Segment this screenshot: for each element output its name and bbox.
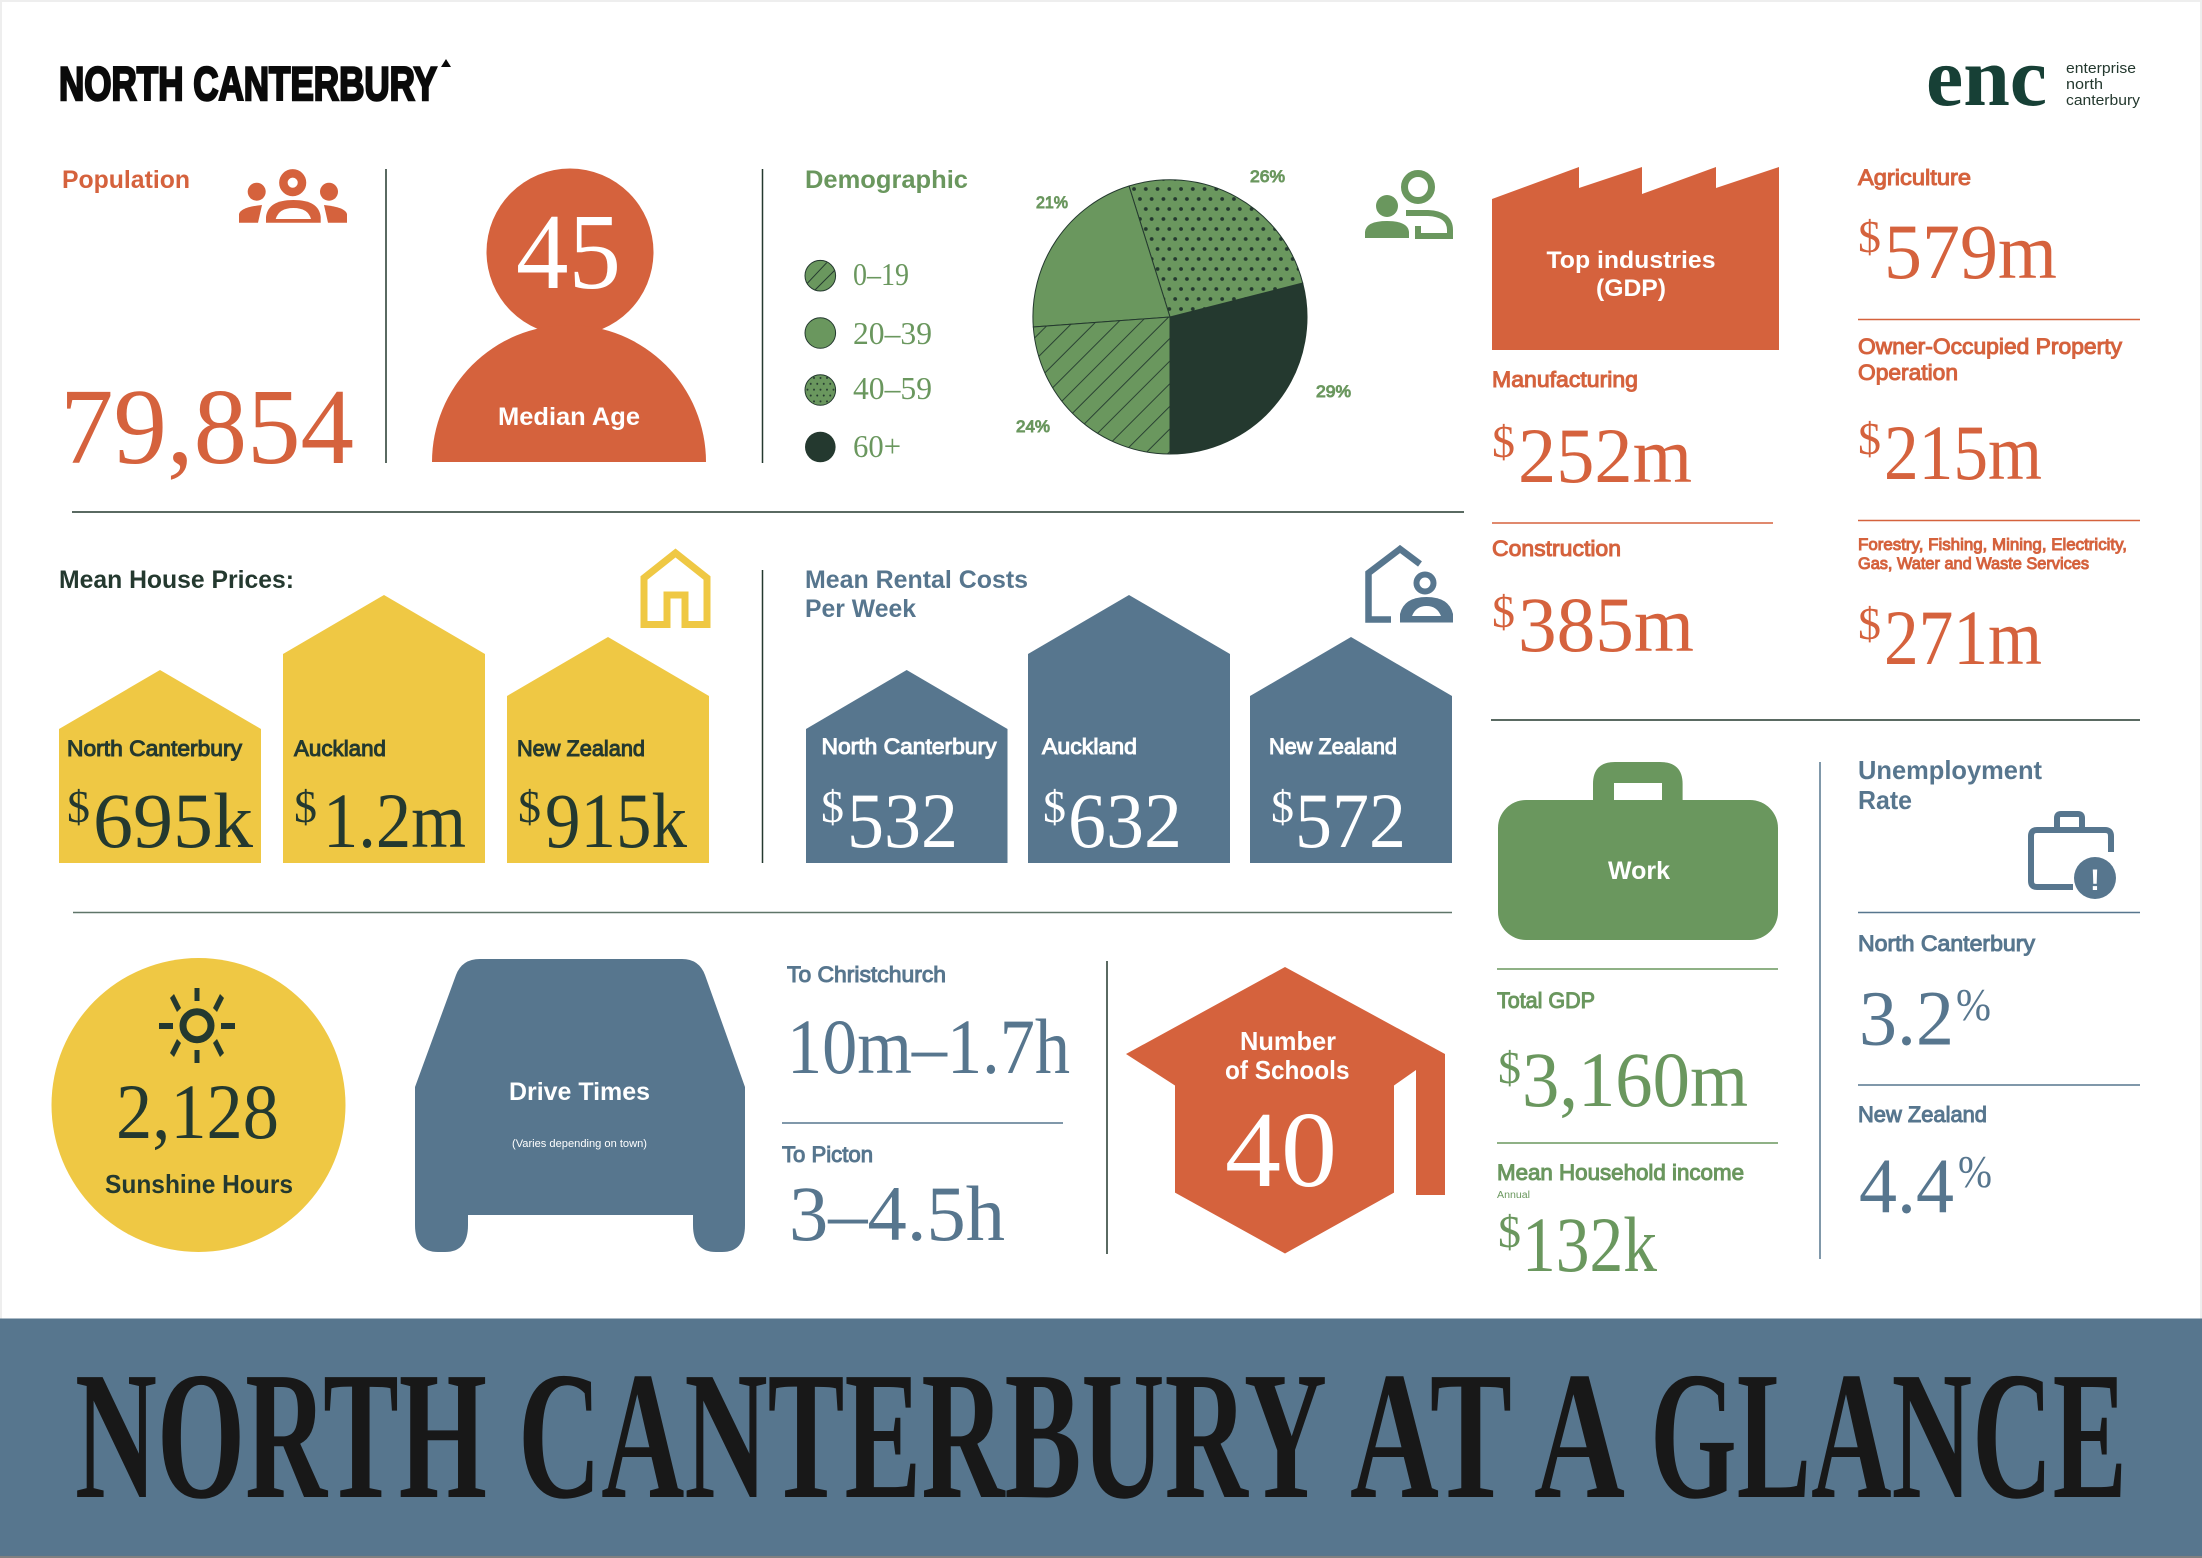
stat: forestry, fishing, mining: Gas, Water and Waste Services	[1858, 554, 2089, 573]
note: varies: (Varies depending on town)	[512, 1138, 647, 1150]
house: Auckland	[283, 595, 485, 864]
heading: unemployment rate	[1858, 755, 2042, 815]
stat: agriculture	[1858, 165, 2057, 295]
label: drive times: Drive Times	[509, 1078, 650, 1106]
panel: number of schools	[1126, 967, 1445, 1254]
house: North Canterbury rent	[806, 670, 1008, 864]
stat: manufacturing	[1492, 367, 1692, 499]
stat: to Christchurch: To Christchurch	[787, 962, 946, 987]
stat: New Zealand unemployment: New Zealand	[1858, 1102, 1987, 1127]
heading: unemployment rate: Rate	[1858, 785, 1912, 815]
legend: 0–19	[853, 256, 909, 292]
stat: manufacturing: $	[1492, 416, 1515, 467]
label: sunshine hours: Sunshine Hours	[105, 1169, 293, 1199]
stat: North Canterbury unemployment: %	[1956, 979, 1991, 1030]
stat: mean household income	[1497, 1160, 1744, 1288]
panel: sunshine hours	[52, 958, 346, 1252]
stat: construction: Construction	[1492, 536, 1621, 561]
icon: people group	[239, 173, 347, 223]
house: New Zealand rent: New Zealand	[1269, 734, 1397, 759]
legend: 60+	[853, 428, 901, 464]
stat: New Zealand unemployment: %	[1958, 1146, 1992, 1197]
heading: demographic: Demographic	[805, 166, 968, 194]
house: Auckland: $	[294, 781, 317, 832]
logo: enterprise north canterbury	[1926, 31, 2141, 124]
icon: car	[415, 959, 745, 1252]
stat: forestry, fishing, mining: 271m	[1884, 594, 2042, 681]
stat: forestry, fishing, mining	[1858, 535, 2127, 681]
stat: construction: 385m	[1518, 581, 1694, 668]
stat: mean household income: Mean Household income	[1497, 1160, 1744, 1185]
heading: unemployment rate: Unemployment	[1858, 755, 2042, 785]
legend: 40–59	[853, 370, 932, 406]
stat: North Canterbury unemployment: 3.2	[1859, 974, 1954, 1062]
stat: manufacturing: 252m	[1518, 412, 1692, 499]
pie labels	[1016, 167, 1351, 436]
icon: briefcase: Work	[1608, 857, 1670, 885]
stat: to Christchurch: 10m–1.7h	[787, 1003, 1070, 1090]
pie labels: 29%	[1316, 382, 1351, 401]
house: North Canterbury rent: $	[821, 781, 844, 832]
panel: work	[1497, 762, 1778, 1288]
label: median age: Median Age	[498, 403, 640, 431]
house: New Zealand: New Zealand	[517, 736, 645, 761]
panel: mean rental costs	[805, 549, 1453, 864]
icon: briefcase alert	[2031, 814, 2116, 899]
house: New Zealand rent: $	[1271, 781, 1294, 832]
stat: North Canterbury unemployment: North Canterbury	[1858, 931, 2035, 956]
icon: sun	[159, 988, 235, 1063]
title	[75, 1334, 2127, 1537]
figure: median age: 45	[516, 193, 621, 312]
logo: enterprise north canterbury: enterprise	[2066, 60, 2136, 77]
pie labels: 26%	[1250, 167, 1285, 186]
title: AT	[1350, 1334, 1512, 1537]
icon: factory	[1492, 167, 1779, 350]
heading: mean rental costs: Mean Rental Costs	[805, 566, 1028, 594]
stat: mean household income: 132k	[1522, 1201, 1657, 1288]
icon: factory: (GDP)	[1596, 275, 1666, 302]
stat: total GDP	[1497, 988, 1748, 1123]
stat: agriculture: Agriculture	[1858, 165, 1971, 190]
stat: to Picton: To Picton	[782, 1142, 873, 1167]
stat: mean household income: $	[1498, 1206, 1521, 1257]
stat: owner-occupied property	[1858, 334, 2122, 496]
label: number of schools	[1225, 1026, 1350, 1085]
figure: population total: 79,854	[60, 368, 354, 487]
pie chart	[1033, 180, 1307, 454]
stat: agriculture: $	[1858, 211, 1881, 262]
stat: total GDP: $	[1498, 1042, 1521, 1093]
stat: New Zealand unemployment	[1858, 1102, 1992, 1230]
title: A	[1534, 1334, 1625, 1537]
house: Auckland rent: $	[1043, 781, 1066, 832]
logo: enterprise north canterbury: enc	[1926, 31, 2047, 124]
house: Auckland: 1.2m	[323, 777, 466, 864]
icon: house outline	[644, 553, 707, 624]
heading: mean rental costs: Per Week	[805, 595, 916, 623]
figure: sunshine hours: 2,128	[116, 1068, 279, 1155]
stat: manufacturing: Manufacturing	[1492, 367, 1638, 392]
house: North Canterbury: $	[67, 781, 90, 832]
panel: mean house prices	[59, 553, 709, 864]
logo: North Canterbury: NORTH CANTERBURY	[59, 57, 437, 110]
house: New Zealand rent: 572	[1295, 777, 1406, 864]
stat: agriculture: 579m	[1884, 208, 2057, 295]
figure: schools: 40	[1225, 1091, 1337, 1210]
heading: mean rental costs	[805, 566, 1028, 623]
logo: enterprise north canterbury: canterbury	[2066, 92, 2141, 109]
icon: briefcase	[1498, 762, 1778, 940]
legend: 20–39	[853, 315, 932, 351]
title banner	[0, 1318, 2202, 1558]
house: Auckland: Auckland	[294, 736, 386, 761]
heading: mean house prices: Mean House Prices:	[59, 566, 294, 594]
icon: factory: Top industries	[1546, 247, 1716, 274]
stat: to Christchurch	[787, 962, 1070, 1090]
panel: drive times	[415, 959, 1070, 1257]
stat: owner-occupied property: Owner-Occupied Property	[1858, 334, 2122, 359]
stat: owner-occupied property: 215m	[1884, 409, 2042, 496]
icon: graduation cap	[1126, 967, 1445, 1254]
panel: demographic	[805, 166, 1450, 464]
house: North Canterbury: 695k	[93, 777, 253, 864]
stat: total GDP: Total GDP	[1497, 988, 1595, 1013]
panel: unemployment rate	[1858, 755, 2140, 1230]
stat: mean household income: Annual	[1497, 1190, 1530, 1201]
icon: briefcase alert: !	[2090, 864, 2100, 897]
stat: to Picton: 3–4.5h	[789, 1170, 1005, 1257]
house: New Zealand: 915k	[545, 777, 687, 864]
icon: house with person	[1368, 549, 1453, 622]
stat: construction: $	[1492, 586, 1515, 637]
house: New Zealand	[507, 637, 709, 864]
stat: New Zealand unemployment: 4.4	[1859, 1142, 1954, 1230]
house: New Zealand: $	[518, 781, 541, 832]
stat: forestry, fishing, mining: $	[1858, 598, 1881, 649]
legend	[805, 256, 932, 464]
house: North Canterbury rent: North Canterbury	[822, 734, 996, 759]
label: number of schools: of Schools	[1225, 1055, 1350, 1085]
house: Auckland rent: 632	[1068, 777, 1182, 864]
house: North Canterbury rent: 532	[847, 777, 958, 864]
panel: top industries	[1492, 165, 2140, 681]
panel: median age person	[432, 168, 706, 462]
stat: forestry, fishing, mining: Forestry, Fishing, Mining, Electricity,	[1858, 535, 2127, 554]
title: NORTH	[75, 1334, 487, 1537]
pie labels: 24%	[1016, 417, 1050, 436]
stat: owner-occupied property: Operation	[1858, 360, 1958, 385]
label: number of schools: Number	[1240, 1026, 1336, 1056]
logo: enterprise north canterbury: north	[2066, 76, 2103, 93]
title: CANTERBURY	[518, 1334, 1327, 1537]
stat: construction	[1492, 536, 1694, 668]
stat: North Canterbury unemployment	[1858, 931, 2035, 1062]
house: New Zealand rent	[1250, 637, 1452, 864]
stat: owner-occupied property: $	[1858, 413, 1881, 464]
heading: population: Population	[62, 166, 190, 194]
house: North Canterbury: North Canterbury	[67, 736, 242, 761]
stat: total GDP: 3,160m	[1522, 1036, 1748, 1123]
house: Auckland rent	[1028, 595, 1230, 864]
house: Auckland rent: Auckland	[1042, 734, 1137, 759]
pie labels: 21%	[1036, 193, 1068, 212]
house: North Canterbury	[59, 670, 261, 864]
icon: two people	[1365, 174, 1450, 238]
panel: population	[60, 166, 354, 487]
